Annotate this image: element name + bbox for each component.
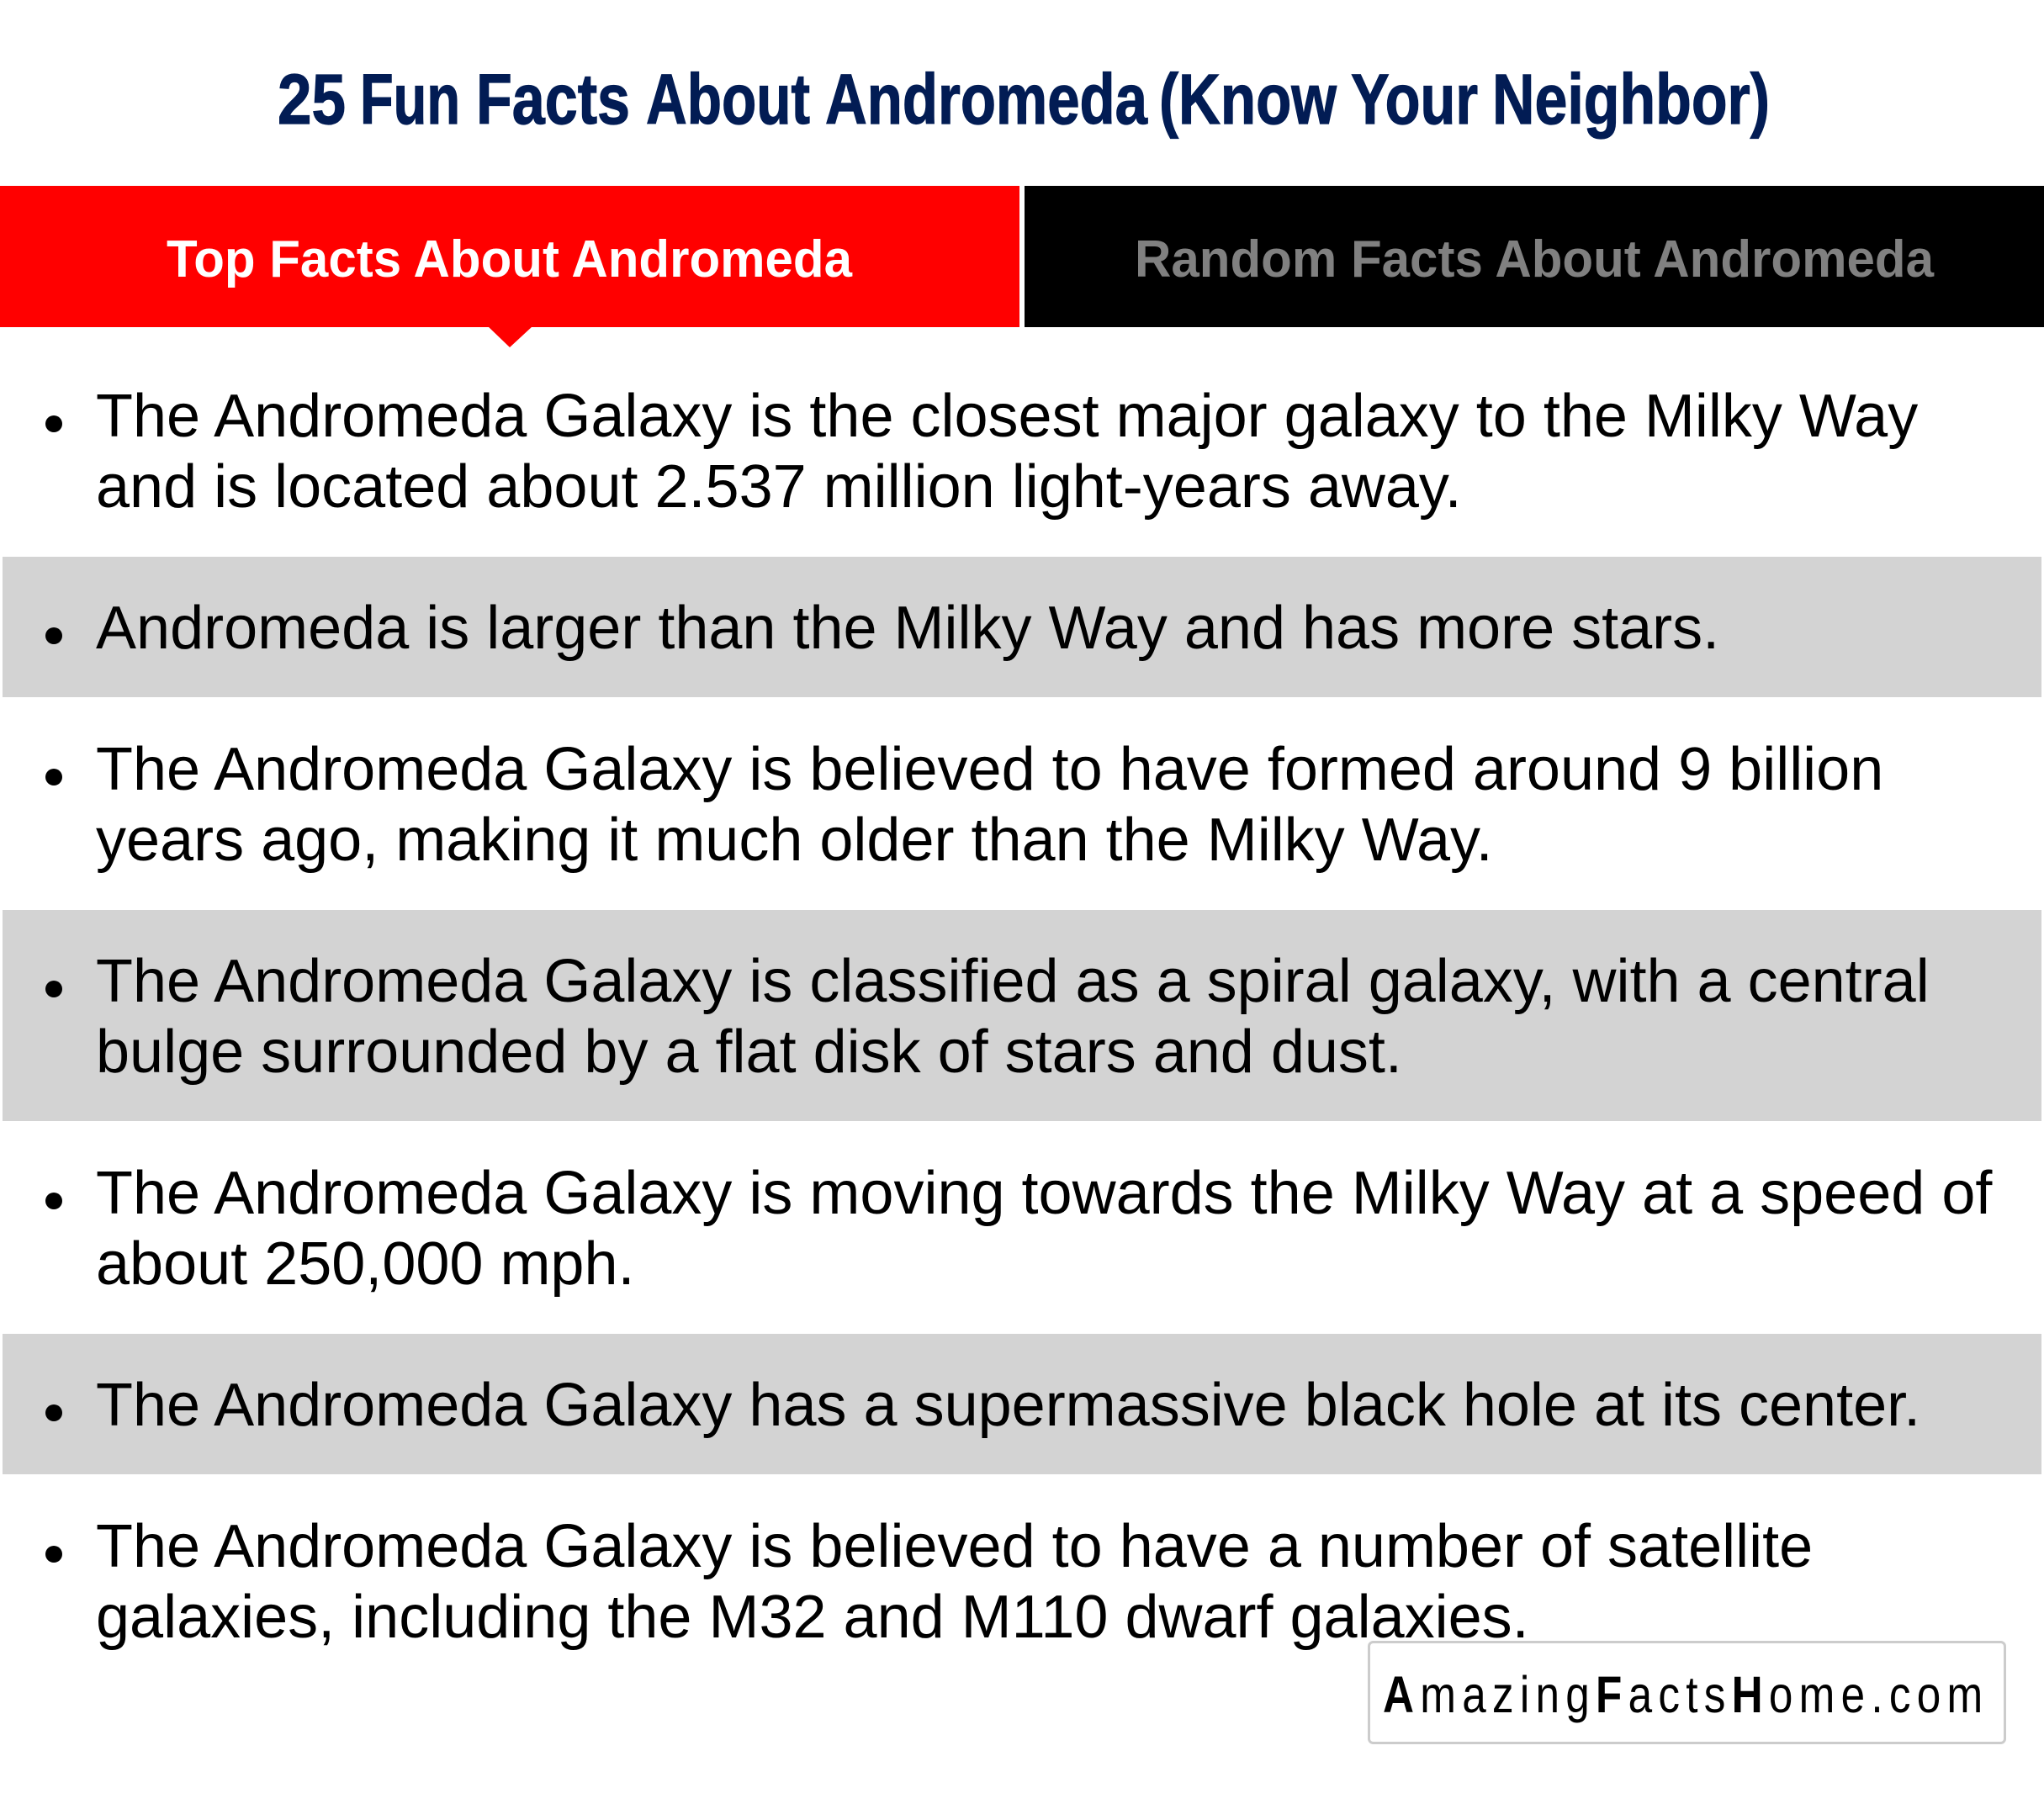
fact 7 [45, 1513, 1813, 1651]
tab: top facts (active): Top Facts About Andromeda [167, 230, 852, 288]
fact 5 [45, 1160, 1993, 1298]
tab: random facts (inactive): Random Facts About Andromeda [1135, 230, 1934, 288]
fact 4: The Andromeda Galaxy is classified as a spiral galaxy, with a central [96, 948, 1930, 1015]
title: (Know [1159, 60, 1337, 139]
fact 6: The Andromeda Galaxy has a supermassive black hole at its center. [96, 1372, 1920, 1439]
title [278, 60, 1770, 139]
fact 1: The Andromeda Galaxy is the closest major galaxy to the Milky Way [96, 383, 1918, 450]
watermark logo [1369, 1642, 2005, 1743]
watermark logo: AmazingFactsHome.com [1383, 1666, 1983, 1723]
fact 5: about 250,000 mph. [96, 1230, 635, 1298]
tab: random facts (inactive) [1025, 186, 2044, 327]
fact 3 [45, 736, 1883, 874]
fact 4: bulge surrounded by a flat disk of stars and dust. [96, 1018, 1402, 1086]
fact 4 [3, 910, 2041, 1121]
fact 2 [3, 557, 2041, 697]
fact 5: The Andromeda Galaxy is moving towards the Milky Way at a speed of [96, 1160, 1993, 1227]
fact 1 [45, 383, 1918, 521]
title: About [646, 60, 810, 139]
fact 1: and is located about 2.537 million light-years away. [96, 453, 1462, 521]
title: Andromeda [825, 60, 1148, 139]
title: Neighbor) [1492, 60, 1770, 139]
title: Your [1351, 60, 1478, 139]
title: Facts [476, 60, 630, 139]
title: 25 [278, 60, 346, 139]
fact 7: galaxies, including the M32 and M110 dwarf galaxies. [96, 1584, 1529, 1651]
fact 3: The Andromeda Galaxy is believed to have formed around 9 billion [96, 736, 1883, 803]
fact 2: Andromeda is larger than the Milky Way and has more stars. [96, 595, 1719, 662]
fact 7: The Andromeda Galaxy is believed to have a number of satellite [96, 1513, 1813, 1580]
fact 3: years ago, making it much older than the Milky Way. [96, 807, 1493, 874]
tab: top facts (active) [0, 186, 1019, 347]
fact 6 [3, 1334, 2041, 1474]
title: Fun [360, 60, 460, 139]
